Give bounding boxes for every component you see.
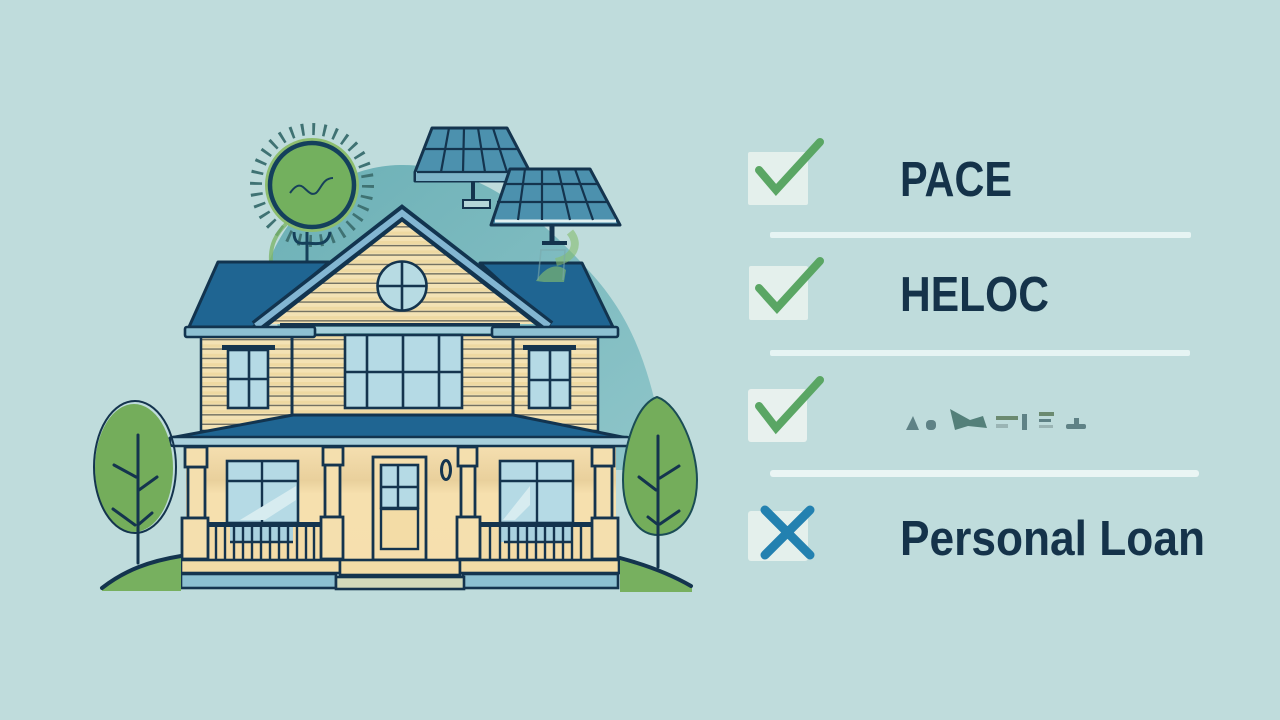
front door	[373, 457, 426, 560]
porch deck	[181, 560, 619, 575]
left ground	[102, 556, 181, 591]
left ground outline	[102, 556, 181, 588]
right ground	[620, 558, 692, 592]
porch column 1	[182, 447, 208, 559]
garbled label marks	[906, 409, 1086, 430]
upper center window	[345, 335, 462, 408]
left roof	[189, 262, 329, 327]
checklist	[748, 142, 1205, 566]
label: PACE: PACE	[900, 153, 1012, 207]
row: Personal Loan	[748, 510, 1205, 566]
upper wall	[201, 335, 598, 431]
upper left window	[222, 345, 275, 408]
icon: check box	[748, 142, 820, 205]
house	[170, 213, 630, 589]
icon: right tree	[623, 397, 697, 567]
teal backdrop shape	[268, 165, 654, 470]
left railing	[208, 524, 320, 559]
row: PACE	[748, 142, 1012, 207]
central beam	[280, 323, 520, 333]
icon: plant wisp on roof	[536, 232, 575, 282]
front step	[336, 577, 464, 589]
porch right window	[500, 461, 573, 523]
porch column 3	[457, 447, 480, 559]
porch roof	[170, 415, 627, 438]
porch left window	[227, 461, 298, 523]
upper right window	[523, 345, 576, 408]
label: HELOC: HELOC	[900, 268, 1049, 322]
gable fascia	[256, 213, 549, 327]
icon: sun	[256, 129, 368, 262]
icon: front solar panel	[491, 169, 620, 245]
label: Personal Loan: Personal Loan	[900, 512, 1205, 566]
right roof	[480, 263, 613, 327]
left eave	[185, 327, 315, 337]
row: garbled option	[748, 380, 1086, 442]
icon: check box	[748, 380, 820, 442]
icon: cross box	[748, 510, 810, 561]
gable wall	[262, 213, 543, 324]
icon: rear solar panel	[415, 128, 529, 208]
porch wall	[186, 446, 616, 560]
right ground outline	[620, 558, 691, 586]
round gable window	[377, 261, 427, 311]
door lamp	[442, 460, 450, 480]
icon: check box	[749, 261, 820, 320]
porch column 2	[321, 447, 343, 559]
right railing	[480, 524, 592, 559]
porch column 4	[592, 447, 618, 559]
right eave	[492, 327, 618, 337]
icon: left tree	[94, 401, 176, 563]
row: HELOC	[749, 261, 1049, 322]
foundation	[181, 574, 618, 588]
porch eave	[170, 437, 630, 446]
